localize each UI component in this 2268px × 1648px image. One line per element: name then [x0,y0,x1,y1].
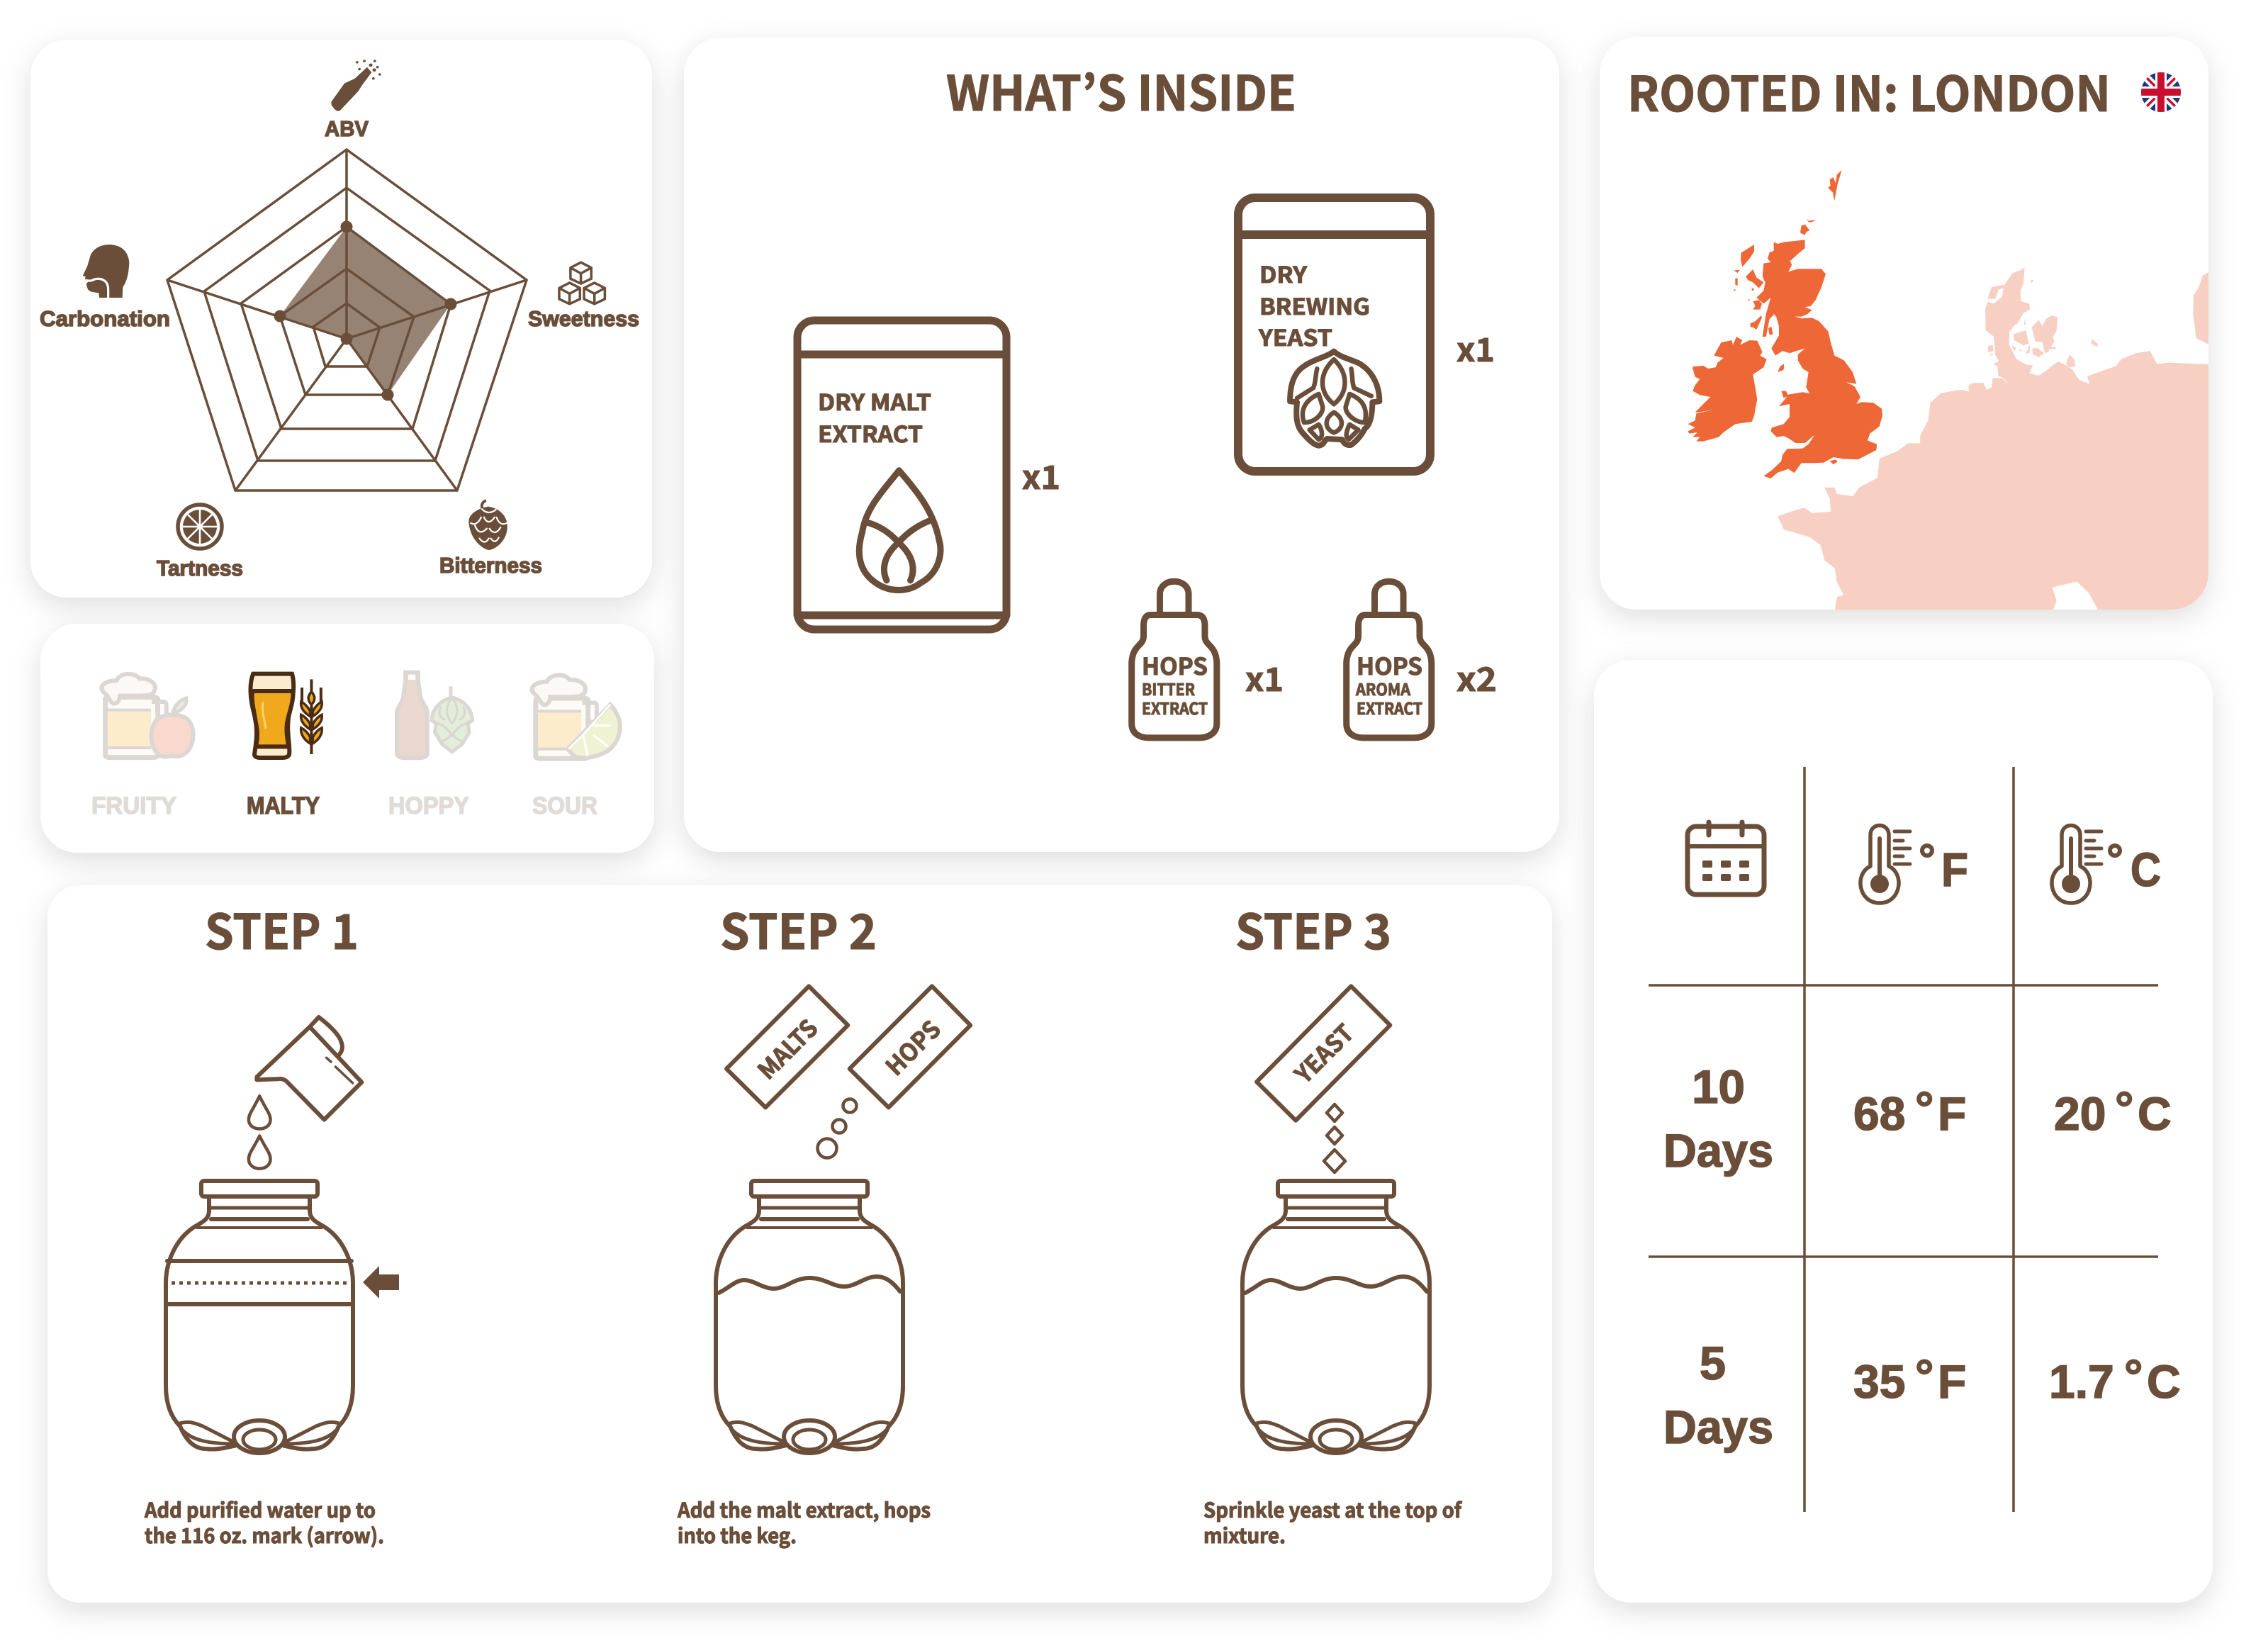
label: Tartness: Tartness [157,556,243,581]
hops aroma extract bottle: HOPS [1357,648,1422,682]
icon: union flag [2140,71,2182,113]
instruction: step 1: Add purified water up to [144,1494,376,1524]
value: 35 F: F [1938,1355,1966,1408]
arrow: fill mark [363,1266,399,1299]
row: 10 days: 10 [1692,1060,1745,1113]
value: 68 F: F [1938,1087,1966,1140]
label: SOUR: SOUR [532,792,597,819]
keg: step 1 with fill mark [166,1181,353,1453]
hops bitter extract bottle: BITTER [1142,676,1195,700]
instruction: step 1: the 116 oz. mark (arrow). [145,1520,384,1549]
row: 5 days: 5 [1700,1337,1726,1389]
quantity: bitter x1: x1 [1245,654,1284,701]
hops bitter extract bottle: HOPS [1142,648,1208,682]
keg: step 2 with liquid [716,1181,903,1453]
value: 35 F: ° [1915,1350,1933,1402]
icon: malty glass and wheat [250,674,322,758]
panel: what's inside [684,38,1559,852]
icon: fruity mug and apple [101,674,193,758]
value: 20 C: ° [2115,1082,2133,1134]
panel: beer style selector [40,624,654,853]
icon: calendar [1688,822,1764,895]
heading: step 2: STEP 2 [720,893,877,963]
icon: water drops [249,1096,271,1169]
map: europe [1778,267,2213,612]
hops aroma extract bottle: AROMA [1355,676,1410,700]
value: 20 C: 20 [2054,1087,2106,1140]
value: 1.7 C: C [2147,1355,2181,1408]
sachet: malts [726,986,848,1107]
label: HOPPY: HOPPY [388,792,469,819]
sachet: hops: HOPS [877,1011,948,1082]
sachet: yeast [1257,986,1390,1121]
dry brewing yeast bag: YEAST [1258,320,1332,353]
heading: what's inside: WHAT’S INSIDE [946,55,1296,125]
hops aroma extract bottle [1347,581,1432,738]
dry malt extract bag [797,320,1006,629]
label: Sweetness: Sweetness [528,306,639,331]
icon: head and throat [83,245,129,298]
value: 20 C: C [2138,1087,2172,1140]
value: 68 F: 68 [1853,1087,1905,1140]
icon: citrus slice [178,505,222,549]
column header: celsius [2052,825,2161,903]
radar data shape [274,221,456,401]
instruction: step 2: Add the malt extract, hops [677,1494,931,1524]
label: FRUITY: FRUITY [91,792,176,819]
label: ABV: ABV [325,116,369,141]
hops aroma extract bottle: EXTRACT [1357,695,1422,719]
value: 35 F: 35 [1853,1355,1905,1408]
value: 68 F: ° [1915,1082,1933,1134]
icon: hop cone [468,500,507,550]
yeast granules [1324,1104,1345,1172]
quantity: malt x1: x1 [1022,452,1060,499]
instruction: step 3: Sprinkle yeast at the top of [1203,1494,1462,1524]
instruction: step 3: mixture. [1203,1520,1286,1549]
quantity: yeast x1: x1 [1456,325,1495,371]
column header: fahrenheit: F [1941,843,1968,897]
heading: step 3: STEP 3 [1235,893,1391,963]
instruction: step 2 [677,1494,931,1549]
heading: step 1: STEP 1 [205,893,359,963]
quantity: aroma x2: x2 [1456,654,1497,701]
icon: bottle popping [332,60,381,111]
dry malt extract bag: EXTRACT [818,417,923,449]
column header: celsius: C [2131,843,2161,897]
panel: flavour radar chart [30,40,652,598]
instruction: step 1 [144,1494,384,1549]
hops bitter extract bottle: EXTRACT [1142,695,1208,719]
panel: rooted in london [1600,37,2213,612]
column header: fahrenheit [1860,825,1968,903]
value: 1.7 C: ° [2124,1350,2143,1402]
dry brewing yeast bag: BREWING [1259,289,1370,322]
bubbles [818,1099,856,1158]
label: Bitterness: Bitterness [439,553,542,578]
dry brewing yeast bag [1238,198,1430,471]
sachet: malts: MALTS [748,1010,824,1086]
table grid [1649,767,2158,1512]
sachet: yeast: YEAST [1285,1015,1360,1090]
icon: sugar cubes [559,262,605,304]
panel: fermentation table [1594,660,2213,1603]
instruction: step 3 [1203,1494,1462,1549]
sachet: hops [850,986,970,1107]
icon: sour mug and lime [532,676,620,758]
label: MALTY: MALTY [247,792,320,819]
hops bitter extract bottle [1132,581,1217,738]
map: united kingdom and ireland [1688,170,1882,478]
dry malt extract bag: DRY MALT [818,385,931,417]
days label: Days [1663,1124,1773,1177]
dry brewing yeast bag: DRY [1259,257,1307,290]
icon: hoppy bottle and hop [397,673,473,758]
icon: measuring jug pouring [257,1017,361,1120]
radar grid [167,150,527,491]
label: Carbonation: Carbonation [40,306,170,331]
keg: step 3 with liquid [1242,1181,1430,1453]
instruction: step 2: into the keg. [678,1520,797,1549]
value: 1.7 C: 1.7 [2049,1355,2114,1408]
heading: rooted in london: ROOTED IN: LONDON [1627,55,2111,125]
panel: brewing steps [47,885,1552,1603]
days label: Days [1663,1401,1773,1453]
